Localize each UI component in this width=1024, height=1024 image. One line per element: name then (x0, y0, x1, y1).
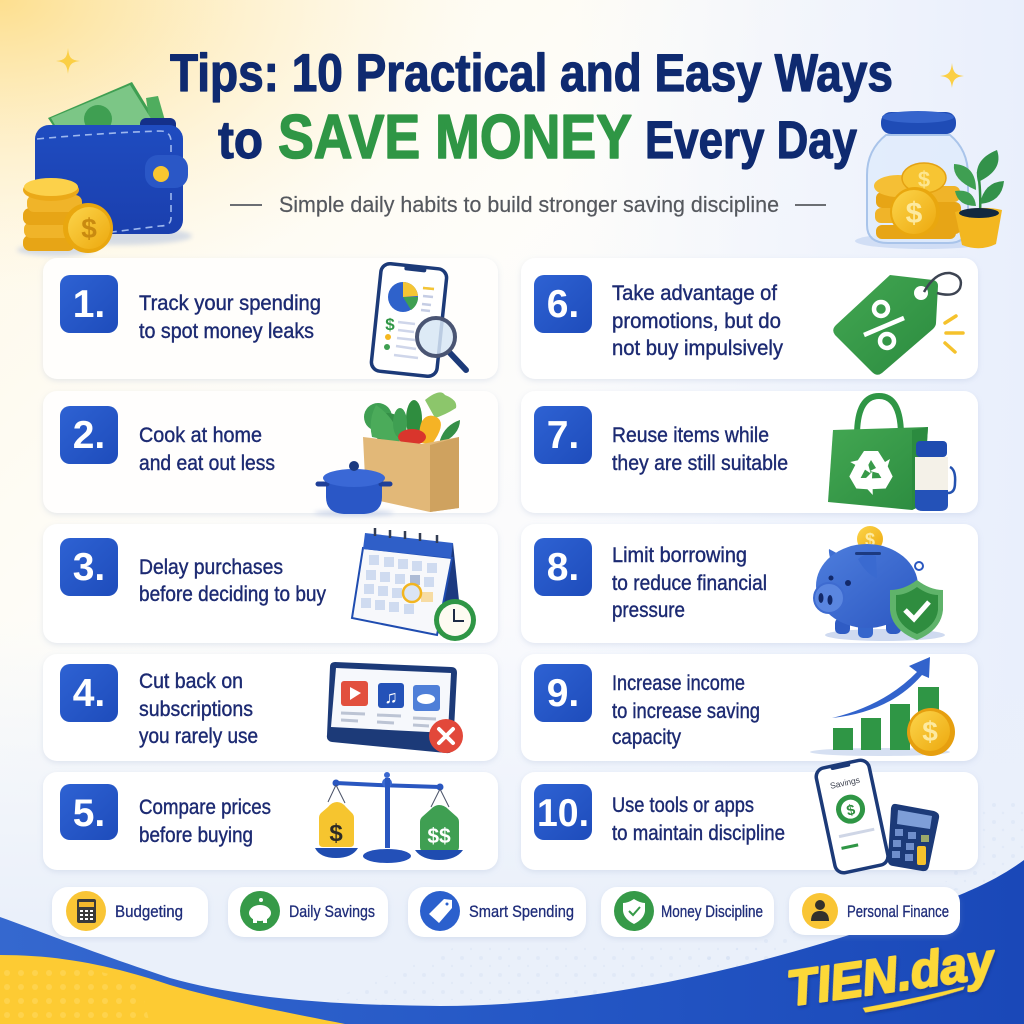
number 2 (60, 406, 118, 464)
icon: wallet with cash and coins: $ (81, 213, 97, 244)
icon: growth chart with coin (810, 657, 955, 756)
icon: balance scale with price tags: $$ (427, 825, 451, 848)
icon: piggy (240, 891, 280, 931)
icon: shield (614, 891, 654, 931)
text tip 5 (139, 795, 271, 847)
number 8: 8. (547, 546, 579, 589)
number 4 (60, 664, 118, 722)
icon: calculator (66, 891, 106, 931)
tag: Personal Finance: Personal Finance (847, 903, 949, 921)
text tip 7 (612, 423, 788, 475)
text tip 1 (139, 291, 321, 343)
number 1 (60, 275, 118, 333)
title: Tips: 10 Practical and Easy Ways (170, 44, 893, 103)
icon: sparkle right (940, 63, 964, 88)
icon: piggy bank with shield (814, 526, 945, 641)
panel: tip 9 (521, 654, 978, 761)
text tip 2: Cook at home (139, 423, 262, 447)
text tip 7: they are still suitable (612, 451, 788, 475)
text tip 10: Use tools or apps (612, 793, 754, 817)
footer wave: blue band (0, 860, 1024, 1024)
tag: Daily Savings (228, 887, 388, 937)
panel: tip 8 (521, 524, 978, 643)
title: to (218, 111, 263, 170)
icon: grocery bag and pot (314, 392, 460, 516)
text tip 4: you rarely use (139, 724, 258, 748)
panel: tip 3 (43, 524, 498, 643)
text tip 8: pressure (612, 598, 685, 622)
footer wave: yellow band (0, 955, 345, 1024)
text tip 9: capacity (612, 725, 681, 749)
text tip 10 (612, 793, 785, 845)
number 6: 6. (547, 283, 579, 326)
panel: tip 6 (521, 258, 978, 379)
icon: reusable bag and bottle (828, 396, 955, 511)
number 1: 1. (73, 283, 105, 326)
number 4: 4. (73, 672, 105, 715)
title: SAVE MONEY (278, 103, 632, 172)
icon: tag (420, 891, 460, 931)
icon: wallet with cash and coins (17, 82, 192, 256)
tag: Daily Savings: Daily Savings (289, 903, 375, 921)
tag: Personal Finance (789, 887, 960, 935)
tag: Smart Spending: Smart Spending (469, 903, 574, 921)
text tip 1: Track your spending (139, 291, 321, 315)
text tip 3: Delay purchases (139, 555, 283, 579)
icon: savings jar with coins and plant (855, 111, 1004, 249)
text tip 9 (612, 671, 760, 749)
text tip 4: Cut back on (139, 669, 243, 693)
number 7: 7. (547, 414, 579, 457)
panel: tip 7 (521, 391, 978, 513)
panel: tip 1 (43, 258, 498, 379)
panel: tip 10 (521, 759, 978, 874)
text tip 5: before buying (139, 823, 253, 847)
icon: balance scale with price tags (315, 772, 463, 863)
text tip 10: to maintain discipline (612, 821, 785, 845)
text tip 9: Increase income (612, 671, 745, 695)
title: Every Day (645, 111, 857, 170)
tag: Money Discipline: Money Discipline (661, 903, 763, 921)
icon: savings phone and calculator (815, 759, 939, 874)
text tip 2 (139, 423, 275, 475)
number 2: 2. (73, 414, 105, 457)
icon: savings phone and calculator: $ (845, 801, 857, 820)
panel: tip 5 (43, 772, 498, 870)
text tip 8 (612, 543, 767, 622)
icon: phone with magnifier (371, 263, 466, 377)
text tip 6 (612, 281, 783, 360)
number 6 (534, 275, 592, 333)
text tip 6: Take advantage of (612, 281, 777, 305)
icon: savings jar with coins and plant: $ (918, 167, 930, 192)
text tip 6: not buy impulsively (612, 336, 783, 360)
panel: tip 2 (43, 391, 498, 516)
icon: balance scale with price tags: $ (329, 820, 343, 847)
number 10: 10. (537, 792, 589, 835)
text tip 1: to spot money leaks (139, 319, 314, 343)
tag: Budgeting: Budgeting (115, 903, 183, 921)
text tip 4: subscriptions (139, 697, 253, 721)
logo: TIEN.day: TIEN.day (783, 932, 999, 1017)
icon: piggy bank with shield: $ (865, 530, 875, 550)
subtitle: Simple daily habits to build stronger saving discipline (279, 192, 779, 217)
text tip 6: promotions, but do (612, 309, 781, 333)
number 9: 9. (547, 672, 579, 715)
icon: savings jar with coins and plant: $ (906, 197, 923, 230)
text tip 2: and eat out less (139, 451, 275, 475)
number 3: 3. (73, 546, 105, 589)
icon: person (802, 893, 838, 929)
tag: Money Discipline (601, 887, 774, 937)
text tip 4 (139, 669, 258, 748)
number 5: 5. (73, 792, 105, 835)
icon: tablet with subscriptions (327, 662, 463, 753)
tag: Budgeting (52, 887, 208, 937)
number 9 (534, 664, 592, 722)
icon: discount tag (833, 273, 963, 375)
title (170, 44, 893, 172)
number 7 (534, 406, 592, 464)
icon: phone with magnifier: $ (385, 315, 395, 334)
icon: growth chart with coin: $ (922, 716, 938, 747)
icon: savings phone and calculator: Savings (829, 775, 861, 791)
text tip 8: Limit borrowing (612, 543, 747, 567)
number 5 (60, 784, 118, 840)
number 8 (534, 538, 592, 596)
text tip 8: to reduce financial (612, 571, 767, 595)
text tip 9: to increase saving (612, 699, 760, 723)
tag: Smart Spending (408, 887, 586, 937)
text tip 7: Reuse items while (612, 423, 769, 447)
icon: calendar and clock (352, 528, 476, 641)
icon: sparkle left (56, 48, 80, 74)
number 3 (60, 538, 118, 596)
icon: tablet with subscriptions: ♫ (384, 687, 398, 707)
panel: tip 4 (43, 654, 498, 761)
text tip 3: before deciding to buy (139, 582, 326, 606)
text tip 3 (139, 555, 326, 606)
text tip 5: Compare prices (139, 795, 271, 819)
